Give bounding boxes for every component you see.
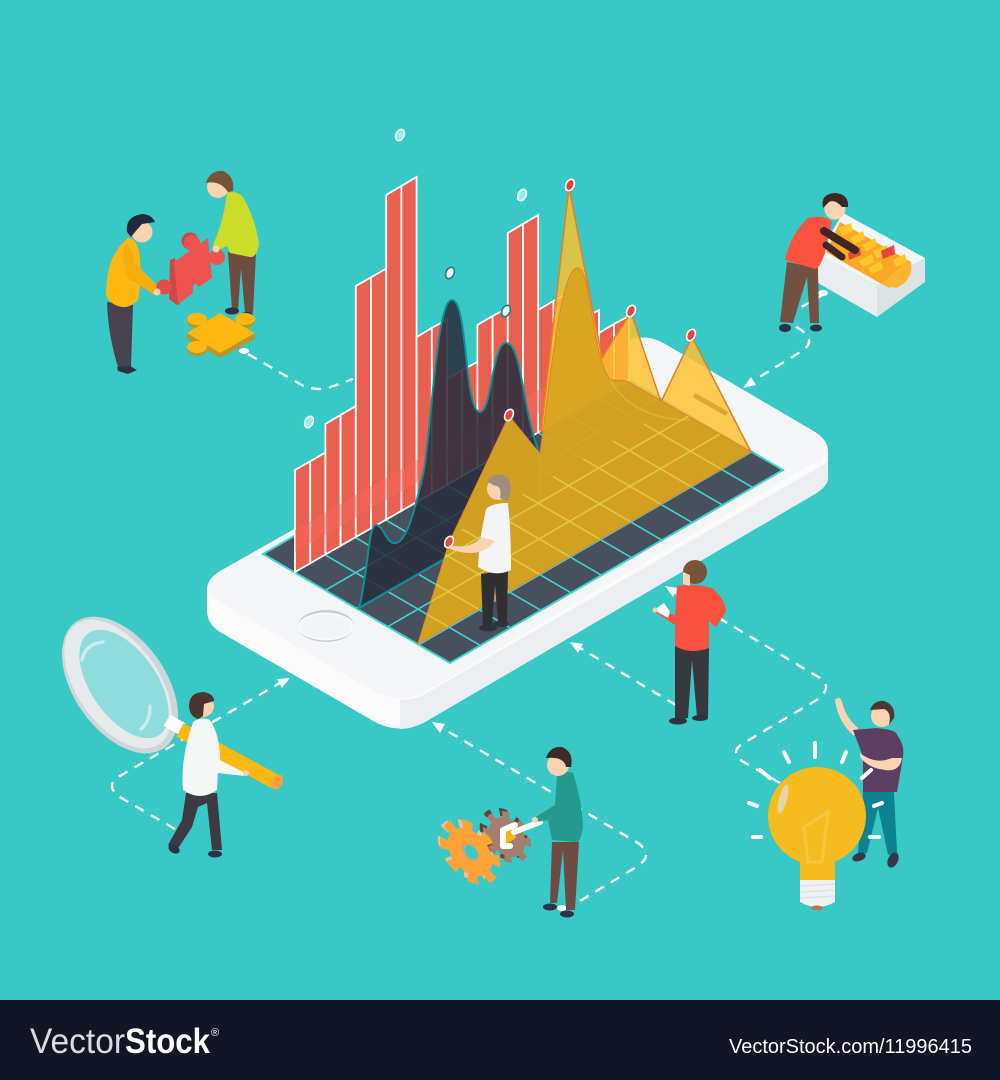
- light bulb: [768, 767, 866, 910]
- brown gear: [480, 810, 532, 861]
- back yellow spike chart: [541, 187, 751, 452]
- footer image id: VectorStock.com/11996415: [729, 1036, 972, 1058]
- chart data markers: [303, 128, 697, 549]
- wrench: [503, 822, 540, 846]
- person on phone in white shirt: [449, 474, 511, 632]
- red bar chart: [295, 177, 629, 572]
- front yellow area chart: [417, 267, 752, 646]
- person with red puzzle: yellow sweater: [106, 214, 157, 374]
- footer logo: Vector: [30, 1022, 125, 1061]
- person carrying magnifier: [167, 692, 249, 858]
- light bulb rays: [749, 743, 882, 837]
- footer logo: [30, 1022, 219, 1061]
- person in red reading: [652, 560, 726, 724]
- dashed connector lines: [112, 293, 826, 901]
- connector arrowheads: [239, 290, 828, 911]
- magnifying glass: [38, 596, 286, 792]
- file box: [818, 213, 925, 317]
- file folders: [826, 222, 911, 288]
- bar reflection band: [295, 372, 570, 552]
- footer logo: ®: [211, 1027, 219, 1039]
- person with wrench: [503, 747, 583, 918]
- orange gear: [436, 821, 502, 883]
- speaker slot: [694, 395, 727, 414]
- person with purple shirt: [835, 698, 903, 869]
- yellow puzzle piece: [187, 313, 255, 358]
- person at file box in red: [779, 193, 855, 332]
- footer logo: Stock: [125, 1022, 210, 1061]
- phone body: [207, 337, 828, 729]
- dark area chart: [359, 300, 539, 608]
- phone screen with grid: [263, 361, 783, 663]
- gears: [436, 810, 532, 883]
- home button: [298, 610, 354, 642]
- red puzzle piece: [154, 232, 225, 305]
- footer bar: [0, 1000, 1000, 1080]
- person with lime sweater: [206, 171, 259, 318]
